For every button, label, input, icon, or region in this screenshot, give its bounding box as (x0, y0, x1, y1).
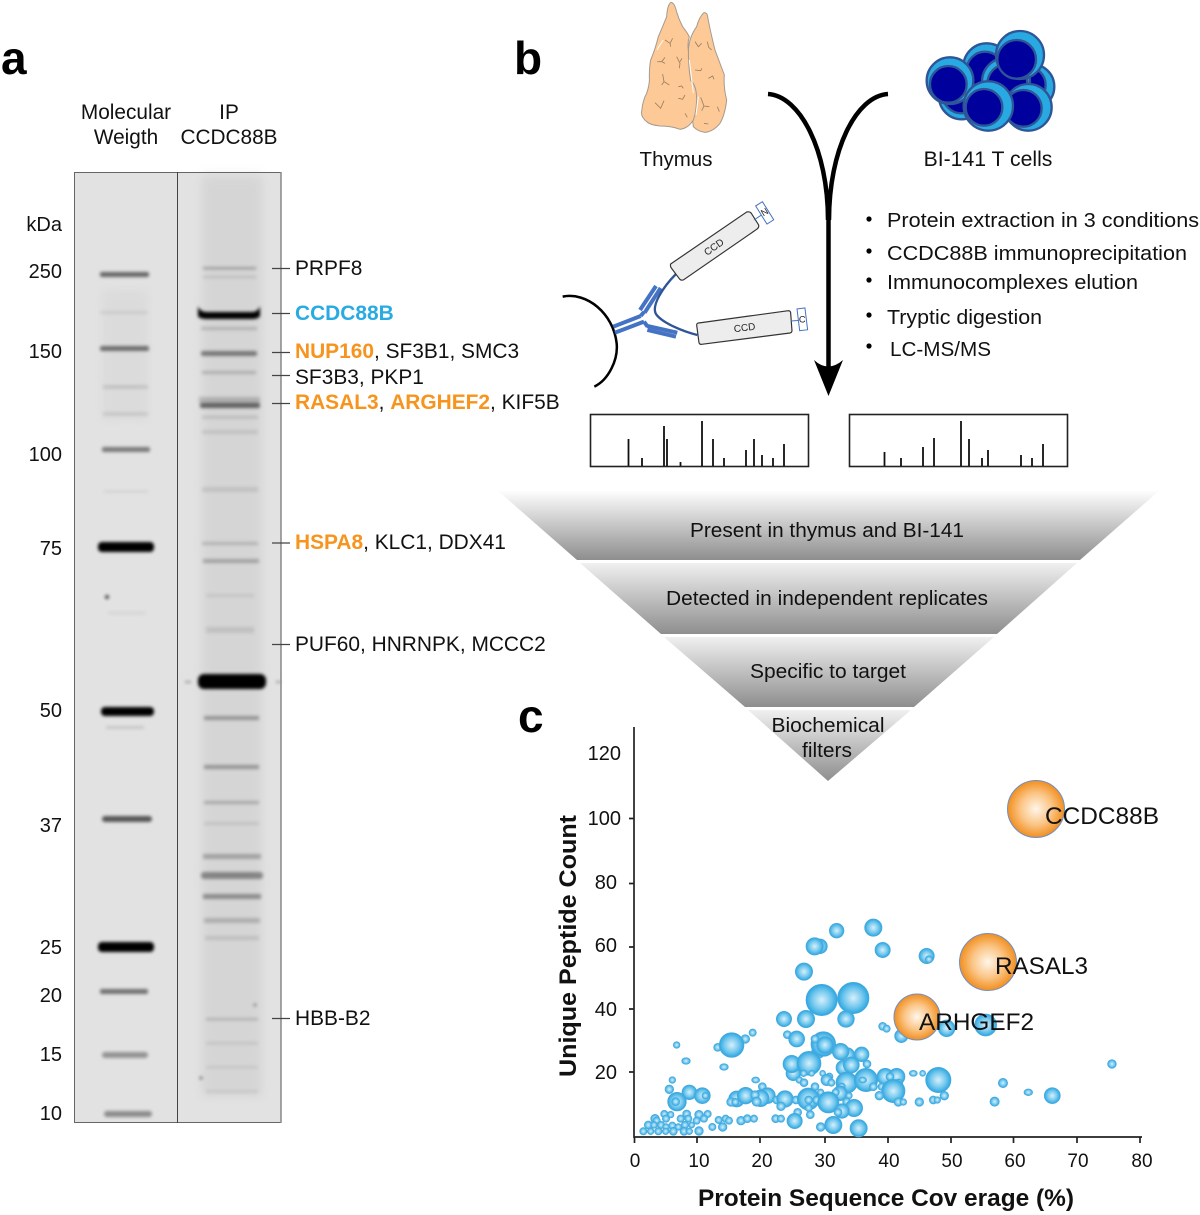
panel c label: c (518, 690, 544, 742)
funnel tier text: Biochemical (772, 715, 884, 737)
protein band labels: SF3B3, PKP1 (295, 366, 424, 389)
thymus label: Thymus (640, 148, 712, 171)
x tick labels: 40 (878, 1151, 900, 1172)
funnel filters (497, 490, 1160, 781)
molecular weight labels: kDa (26, 214, 63, 236)
chart: bubble plot (555, 727, 1159, 1212)
funnel tier 2 (580, 563, 1077, 634)
lane headers (81, 101, 278, 149)
icon: antibody on bead with CCDC88B (563, 202, 808, 387)
x tick labels: 80 (1131, 1151, 1153, 1172)
bubble labels: ARHGEF2 (919, 1009, 1034, 1036)
spectrum: thymus (590, 414, 808, 466)
bubble labels: CCDC88B (1045, 803, 1159, 830)
x tick labels: 20 (751, 1151, 773, 1172)
T cell label: BI-141 T cells (924, 148, 1052, 171)
y axis title: Unique Peptide Count (555, 815, 582, 1077)
icon: antibody on bead with CCDC88B: CCD (733, 322, 756, 335)
molecular weight labels: 10 (40, 1103, 62, 1125)
funnel tier 3 (664, 637, 994, 707)
lane headers: Molecular (81, 101, 171, 124)
protein band labels (295, 257, 560, 1030)
protein band labels: HSPA8, KLC1, DDX41 (295, 531, 506, 554)
workflow steps list: Tryptic digestion (887, 307, 1042, 329)
funnel tier text (666, 520, 988, 762)
molecular weight labels: 250 (29, 261, 62, 283)
icon: T cells cluster (927, 31, 1054, 131)
panel: gel image (74, 172, 281, 1123)
molecular weight labels: 25 (40, 937, 62, 959)
protein band labels: CCDC88B (295, 302, 394, 325)
lane headers: CCDC88B (180, 126, 278, 149)
panel b label: b (514, 32, 542, 84)
funnel tier 1 (497, 490, 1160, 560)
panel a label: a (1, 32, 27, 84)
funnel tier text: filters (802, 740, 852, 762)
x tick labels: 70 (1067, 1151, 1089, 1172)
y tick labels: 40 (595, 999, 617, 1021)
highlighted bubble: CCDC88B (1008, 780, 1064, 838)
bubble labels: RASAL3 (995, 953, 1088, 980)
x tick labels: 60 (1004, 1151, 1026, 1172)
y tick labels: 60 (595, 935, 617, 957)
molecular weight labels: 100 (29, 444, 62, 466)
icon: antibody on bead with CCDC88B: N (759, 206, 770, 218)
x axis title: Protein Sequence Cov erage (%) (698, 1185, 1074, 1212)
band tick marks (272, 268, 290, 1018)
workflow steps list: LC-MS/MS (890, 339, 991, 361)
protein band labels: PUF60, HNRNPK, MCCC2 (295, 633, 546, 656)
marker lane bands (98, 272, 154, 1117)
chart axes (629, 727, 1142, 1143)
workflow steps list (866, 210, 1199, 361)
x tick labels (630, 1151, 1153, 1172)
molecular weight labels: 37 (40, 815, 62, 837)
molecular weight labels: 20 (40, 985, 62, 1007)
molecular weight labels: 150 (29, 341, 62, 363)
x tick labels: 30 (814, 1151, 836, 1172)
funnel tier text: Present in thymus and BI-141 (690, 520, 964, 542)
x tick labels: 10 (688, 1151, 710, 1172)
lane headers: IP (219, 101, 239, 124)
molecular weight labels: 15 (40, 1044, 62, 1066)
x tick labels: 0 (630, 1151, 640, 1172)
icon: thymus (642, 2, 727, 132)
molecular weight labels: 50 (40, 700, 62, 722)
x tick labels: 50 (941, 1151, 963, 1172)
highlighted bubble: ARHGEF2 (894, 994, 940, 1040)
icon: antibody on bead with CCDC88B: C (799, 314, 806, 324)
molecular weight labels (26, 214, 63, 1125)
y tick labels: 100 (588, 808, 621, 830)
arrow: merging workflow arrow (768, 94, 888, 396)
y tick labels: 80 (595, 872, 617, 894)
funnel tier 4 (748, 710, 911, 781)
workflow steps list: CCDC88B immunoprecipitation (887, 243, 1187, 265)
highlighted bubble: RASAL3 (960, 934, 1016, 990)
y tick labels (588, 743, 621, 1084)
workflow steps list: Protein extraction in 3 conditions (887, 210, 1199, 232)
funnel tier text: Detected in independent replicates (666, 588, 988, 610)
IP lane bands (105, 267, 281, 1093)
protein band labels: PRPF8 (295, 257, 362, 280)
protein band labels: HBB-B2 (295, 1007, 370, 1030)
workflow steps list: Immunocomplexes elution (887, 272, 1138, 294)
protein band labels: NUP160, SF3B1, SMC3 (295, 340, 519, 363)
blue protein bubbles (640, 919, 1116, 1137)
molecular weight labels: 75 (40, 538, 62, 560)
funnel tier text: Specific to target (750, 661, 906, 683)
bubble labels (919, 803, 1159, 1036)
spectrum: BI-141 (850, 414, 1068, 466)
y tick labels: 20 (595, 1062, 617, 1084)
y tick labels: 120 (588, 743, 621, 765)
icon: antibody on bead with CCDC88B: CCD (702, 237, 726, 258)
lane headers: Weigth (94, 126, 158, 149)
protein band labels: RASAL3, ARGHEF2, KIF5B (295, 391, 560, 414)
